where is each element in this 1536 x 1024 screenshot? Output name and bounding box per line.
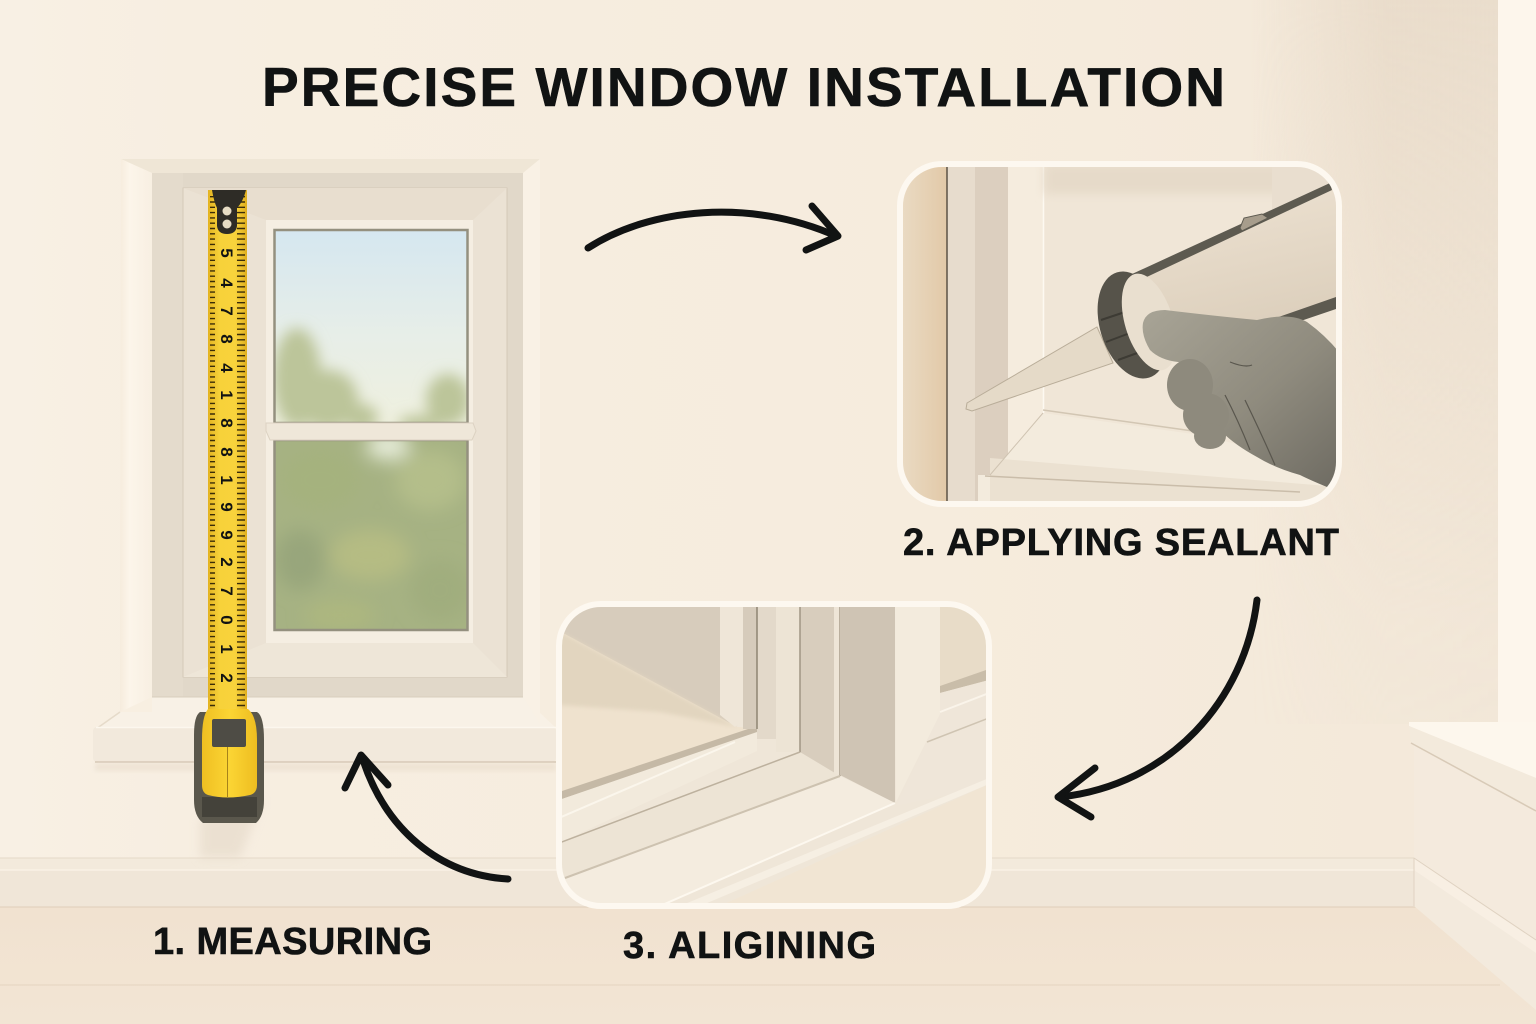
tape digits: 8 — [217, 334, 236, 344]
window with frame, glass and sill — [93, 159, 556, 771]
tube top rail — [1132, 183, 1332, 282]
tube rail clip — [1240, 214, 1268, 231]
right frame bands — [940, 680, 986, 693]
arrow: aligning to measuring — [345, 755, 508, 879]
sealant tube — [1148, 218, 1336, 320]
panel: aligning — [559, 604, 989, 906]
recess side left highlight — [120, 159, 152, 712]
panel border — [900, 164, 1339, 504]
lower pane: blurred trees — [274, 432, 470, 630]
tape measure — [194, 190, 264, 858]
hand — [1143, 310, 1339, 487]
tape digits: 7 — [217, 586, 236, 596]
sash uprights — [720, 712, 736, 726]
back wall — [564, 607, 729, 722]
case body — [194, 712, 264, 823]
label: step 1: 1. MEASURING — [153, 921, 432, 963]
hand creases — [1225, 362, 1275, 465]
tape digits: 0 — [217, 615, 236, 625]
window sash frame — [183, 188, 507, 677]
panel: applying sealant — [900, 164, 1339, 504]
glass strip — [559, 726, 759, 800]
sill upper surface — [93, 697, 555, 733]
tape digits: 1 — [217, 644, 236, 654]
tape digits — [217, 248, 236, 683]
panel scene — [559, 604, 989, 906]
column shadow face — [840, 604, 895, 803]
collar ribs — [1101, 312, 1140, 360]
tick marks — [212, 196, 241, 708]
sill left slope outline — [96, 712, 120, 729]
glazing bar — [266, 423, 476, 440]
floor plane seen through frame — [562, 707, 747, 791]
recess side right — [523, 159, 540, 724]
tape digits: 4 — [217, 278, 236, 288]
floor, lower right — [720, 784, 989, 906]
frame inner side — [152, 173, 183, 703]
tape digits: 8 — [217, 418, 236, 428]
recess top shading — [121, 159, 540, 173]
column light face — [895, 604, 940, 802]
upper pane: sky and tree tops — [273, 230, 470, 433]
arrow: measuring to sealant — [588, 206, 838, 250]
tape digits: 9 — [217, 502, 236, 512]
fingers — [1167, 359, 1229, 449]
wall at right — [940, 604, 989, 686]
glazing bead — [266, 220, 473, 643]
hook rivets — [222, 206, 232, 228]
panel border — [559, 604, 989, 906]
tape digits: 9 — [217, 530, 236, 540]
window recess — [121, 159, 540, 729]
panel scene — [900, 164, 1339, 504]
tape digits: 5 — [217, 248, 236, 258]
case yellow shell — [202, 709, 257, 798]
shadow under sill — [95, 763, 556, 771]
nozzle — [966, 327, 1113, 411]
tape digits: 1 — [217, 390, 236, 400]
sash top — [183, 188, 507, 220]
arrow: sealant to aligning — [1058, 600, 1257, 817]
tape digits: 2 — [217, 673, 236, 683]
tube lower rail — [1279, 297, 1336, 320]
sash bottom — [183, 643, 507, 677]
tape digits: 2 — [217, 557, 236, 567]
tape digits: 1 — [217, 475, 236, 485]
frame strips — [947, 164, 975, 504]
glass strip right — [940, 670, 986, 693]
title: PRECISE WINDOW INSTALLATION — [262, 56, 1225, 118]
collar inner opening — [1122, 274, 1170, 370]
case lower grip — [202, 797, 257, 817]
end hook — [212, 190, 246, 234]
label: step 3: 3. ALIGINING — [623, 925, 876, 967]
collar — [1098, 272, 1160, 378]
right window sill in the room corner — [1409, 722, 1536, 811]
sill front — [93, 727, 556, 762]
outer frame — [152, 173, 523, 703]
inner panel shading — [1042, 167, 1272, 194]
sill bands — [562, 732, 757, 799]
soft shadow — [200, 800, 262, 858]
lower frame — [978, 455, 1008, 501]
case lock button — [212, 719, 246, 747]
tape blade — [208, 190, 247, 712]
tape digits: 4 — [217, 363, 236, 373]
pane edges — [274, 230, 468, 630]
tape digits: 7 — [217, 306, 236, 316]
label: step 2: 2. APPLYING SEALANT — [903, 522, 1339, 564]
tan wall strip — [900, 164, 947, 504]
tape digits: 8 — [217, 447, 236, 457]
